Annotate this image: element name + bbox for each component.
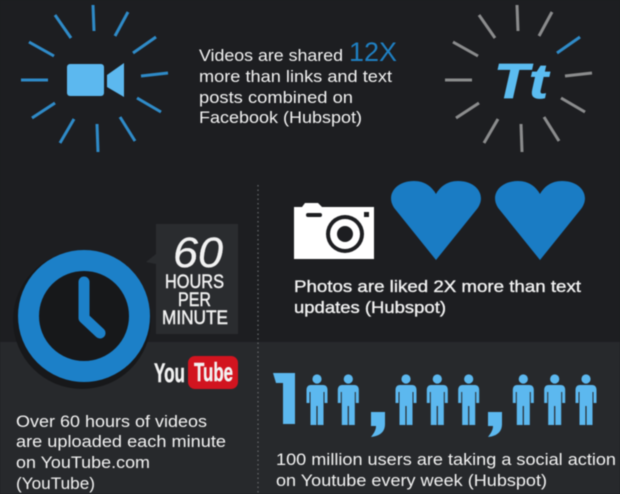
text: videos shared 12X: more than links and text	[199, 67, 392, 86]
text: videos shared 12X: 12X	[349, 37, 397, 67]
graphic: 100,000,000 in person icons	[273, 373, 596, 437]
text: 100 million users	[276, 450, 616, 490]
panel: 100 million users	[273, 373, 616, 490]
callout: 60 hours per minute: MINUTE	[162, 308, 228, 329]
icon: clock	[13, 251, 151, 389]
icon: video camera with rays	[21, 5, 168, 152]
callout: 60 hours per minute: 60	[173, 229, 223, 277]
text: 100 million users: 100 million users are taking a social action	[276, 450, 616, 469]
text: videos shared 12X: Videos are shared	[199, 46, 343, 65]
logo: YouTube: Tube	[194, 357, 233, 387]
text: photos liked 2X: updates (Hubspot)	[294, 298, 446, 317]
logo: YouTube: You	[154, 358, 185, 388]
text: videos shared 12X	[199, 37, 397, 127]
icon: text Tt with rays: Tt	[494, 55, 550, 109]
text: 100 million users: on Youtube every week (Hubspot)	[276, 471, 547, 490]
panel: photos liked	[294, 181, 585, 317]
panel: YouTube hours per minute	[13, 224, 238, 493]
text: over 60 hours uploaded	[16, 412, 226, 493]
logo: YouTube	[154, 356, 238, 389]
text: over 60 hours uploaded: (YouTube)	[16, 474, 95, 493]
text: videos shared 12X: Facebook (Hubspot)	[199, 108, 362, 127]
text: over 60 hours uploaded: on YouTube.com	[16, 453, 150, 472]
text: videos shared 12X: posts combined on	[199, 88, 353, 107]
callout: 60 hours per minute: HOURS	[165, 272, 224, 293]
icon: heart left	[391, 181, 481, 260]
text: over 60 hours uploaded: are uploaded each minute	[16, 432, 226, 451]
icon: text Tt with rays	[445, 5, 592, 152]
text: over 60 hours uploaded: Over 60 hours of videos	[16, 412, 207, 431]
callout: 60 hours per minute	[146, 224, 238, 334]
text: photos liked 2X	[294, 277, 581, 317]
text: photos liked 2X: Photos are liked 2X more than text	[294, 277, 581, 296]
icon: camera	[294, 203, 374, 259]
panel: video shares	[21, 5, 592, 152]
icon: heart right	[495, 181, 585, 260]
callout: 60 hours per minute: PER	[178, 290, 211, 311]
